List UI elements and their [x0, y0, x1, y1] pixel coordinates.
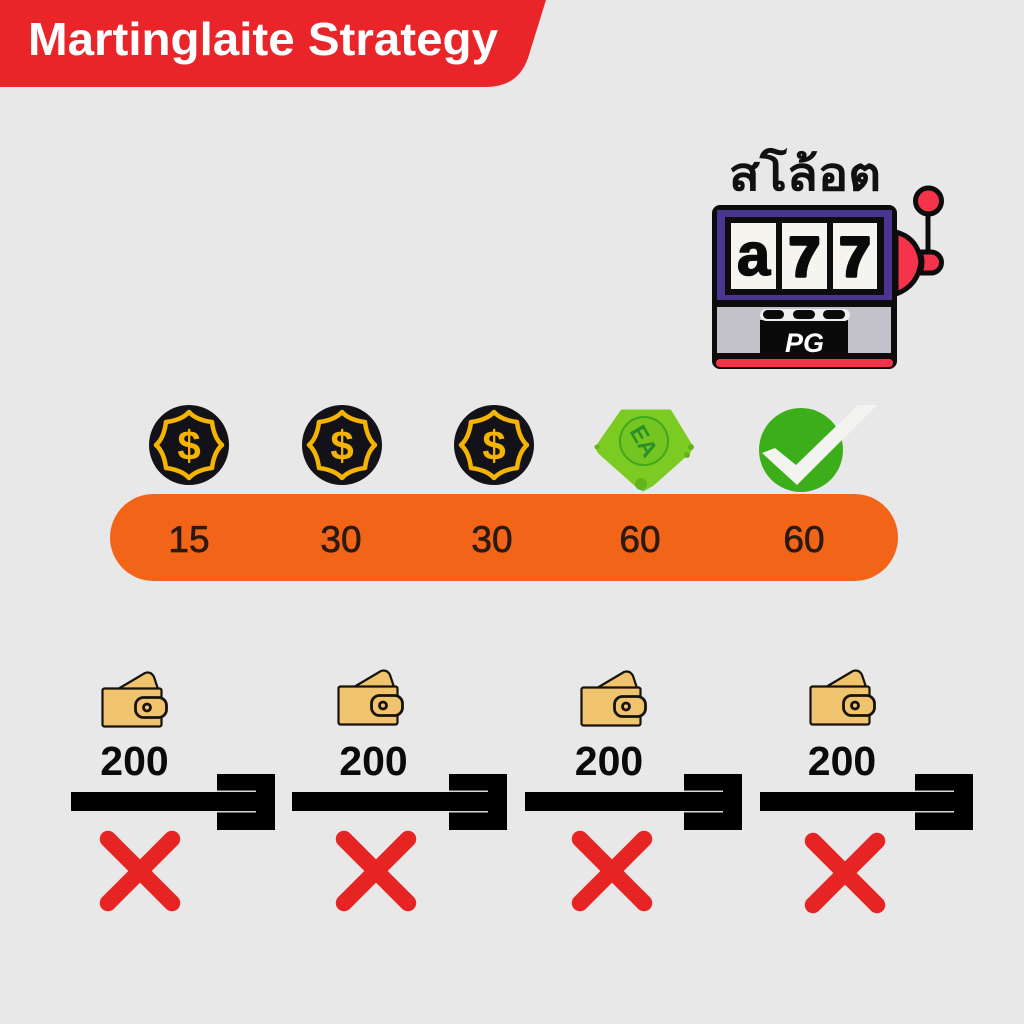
icon: green coin: EA — [625, 421, 663, 461]
icon: green check — [759, 405, 877, 492]
bet values: 60 — [619, 519, 661, 560]
round 4: wallet, balance, line, cross: 200 — [808, 738, 876, 784]
icon: coin 2: $ — [330, 422, 354, 469]
reels — [731, 221, 877, 289]
lower panel — [717, 307, 891, 353]
bet values: 60 — [783, 519, 825, 560]
reel frame — [717, 210, 892, 300]
reels: 7 — [839, 225, 871, 288]
reels: a — [737, 221, 771, 288]
icon: coin 1: $ — [177, 422, 201, 469]
round 3: wallet, balance, line, cross — [525, 672, 742, 903]
title banner — [0, 0, 546, 87]
round 1: wallet, balance, line, cross: 200 — [100, 738, 169, 784]
bet values: 30 — [471, 519, 513, 560]
icon: coin 3 — [454, 405, 534, 485]
title: Martinglaite Strategy — [28, 13, 498, 65]
icon: coin 3: $ — [482, 422, 506, 469]
round 1: wallet, balance, line, cross — [71, 672, 275, 903]
slot heading: สโล้อต — [729, 148, 881, 200]
red base stripe — [716, 359, 893, 367]
round 4: wallet, balance, line, cross — [760, 670, 973, 905]
slot machine logo — [714, 148, 942, 367]
lever — [896, 188, 942, 294]
bet values — [168, 519, 825, 560]
bet values: 30 — [320, 519, 362, 560]
round 2: wallet, balance, line, cross — [292, 670, 507, 903]
coin tray with PG — [760, 309, 850, 358]
icon: coin 2 — [302, 405, 382, 485]
round 3: wallet, balance, line, cross: 200 — [575, 738, 643, 784]
icon: coin 1 — [149, 405, 229, 485]
icon: green coin — [594, 411, 694, 490]
reels: 7 — [789, 225, 820, 288]
coin tray with PG: PG — [785, 328, 824, 358]
bet values: 15 — [168, 519, 210, 560]
machine body — [714, 207, 895, 367]
round 2: wallet, balance, line, cross: 200 — [339, 738, 408, 784]
bet amounts bar — [110, 494, 898, 581]
